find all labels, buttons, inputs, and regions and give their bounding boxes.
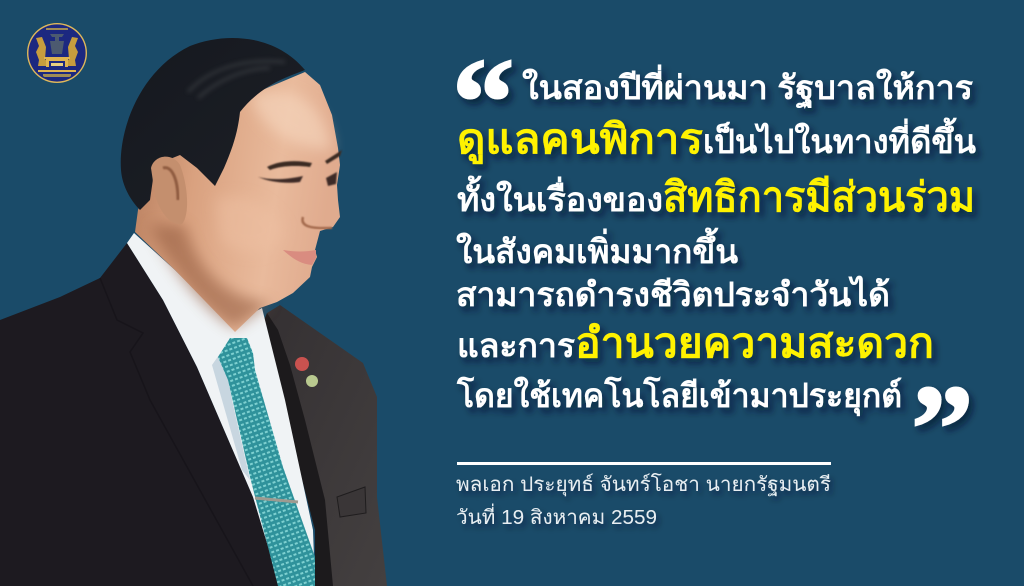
eyebrow [267, 150, 342, 170]
shirt [127, 233, 315, 586]
quote line 4: ในสังคมเพิ่มมากขึ้น [456, 227, 738, 270]
attribution name: พลเอก ประยุทธ์ จันทร์โอชา นายกรัฐมนตรี [456, 473, 831, 497]
quote line 2 [457, 116, 976, 165]
jacket right side [260, 305, 387, 586]
ear [151, 157, 187, 224]
quote line 1: ในสองปีที่ผ่านมา รัฐบาลให้การ [522, 64, 973, 109]
neck and face [135, 72, 340, 332]
quote line 6: และการ [457, 327, 575, 364]
attribution rule [457, 462, 831, 465]
nose [302, 217, 332, 228]
quote line 3 [457, 174, 975, 220]
right lapel edge [260, 313, 333, 586]
quote line 2: เป็นไปในทางที่ดีขึ้น [703, 117, 976, 160]
mouth [283, 250, 316, 265]
quote line 6: อำนวยความสะดวก [575, 320, 934, 366]
jacket left side [0, 243, 280, 586]
pins [295, 357, 309, 371]
icon: government seal [27, 23, 87, 83]
attribution date: วันที่ 19 สิงหาคม 2559 [456, 503, 657, 529]
opening quotation mark: “ [452, 34, 514, 172]
tie clip [255, 498, 298, 502]
quote line 2: ดูแลคนพิการ [457, 116, 703, 165]
hair [121, 38, 305, 210]
quote line 3: สิทธิการมีส่วนร่วม [663, 174, 975, 220]
quote line 7: โดยใช้เทคโนโลยีเข้ามาประยุกต์ [456, 376, 902, 417]
closing quotation mark: ” [911, 361, 974, 499]
eyes [258, 172, 337, 186]
pocket [337, 487, 366, 517]
tie [218, 338, 315, 586]
jacket left lapel notch [100, 278, 253, 586]
face shading [150, 225, 272, 328]
quote line 3: ทั้งในเรื่องของ [457, 175, 663, 218]
portrait of speaker [0, 38, 387, 586]
quote line 5: สามารถดำรงชีวิตประจำวันได้ [456, 275, 890, 313]
hair highlights [188, 61, 285, 98]
